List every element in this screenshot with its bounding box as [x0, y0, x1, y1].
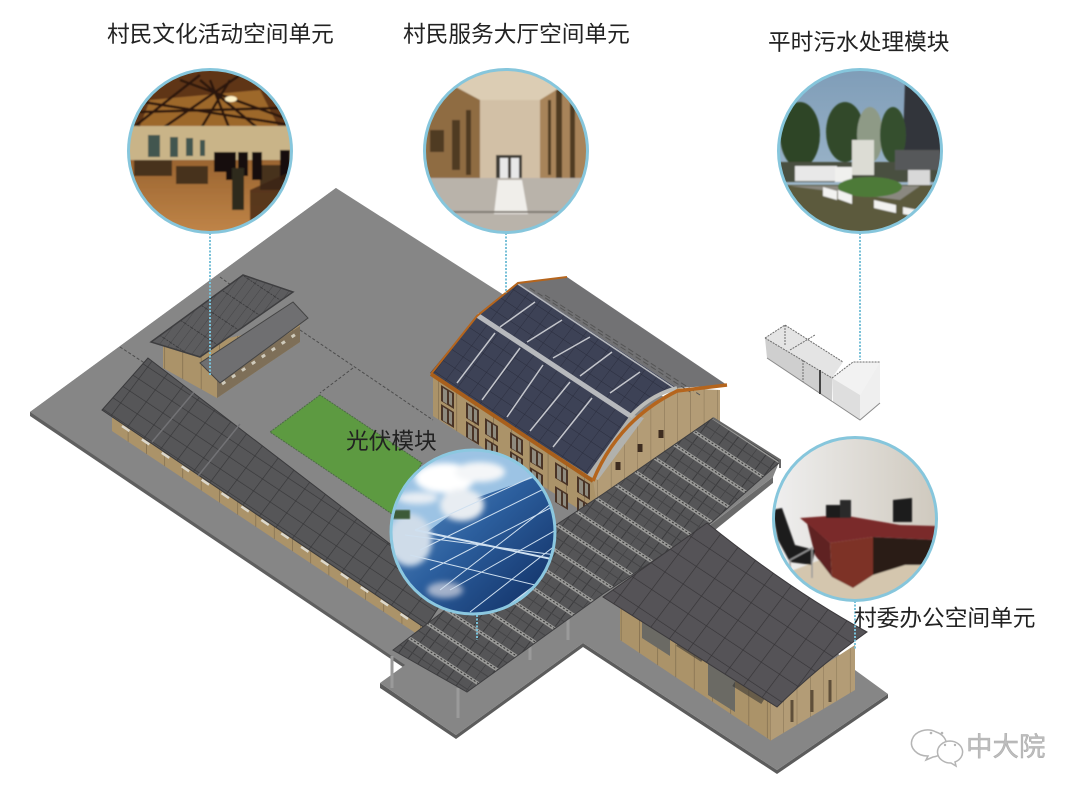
photo circle: village committee office space — [772, 437, 937, 601]
building: main hall walls — [433, 376, 720, 524]
photo circle: village cultural activity space — [128, 70, 292, 234]
lawn courtyard — [270, 395, 422, 514]
leader lines — [210, 233, 860, 650]
heading: village cultural activity space unit: 村民文化活动空间单元 — [107, 21, 334, 47]
heading: village service hall space unit: 村民服务大厅空间单元 — [403, 21, 630, 47]
watermark: WeChat icon and account name — [911, 730, 1046, 766]
main hall roof with solar panels — [430, 277, 727, 481]
labels — [107, 21, 1036, 631]
solar canopy structure — [392, 418, 780, 718]
photo circle: photovoltaic module — [388, 449, 556, 615]
building: village office — [603, 523, 867, 741]
building: long west range — [102, 358, 450, 636]
watermark: WeChat icon and account name: 中大院 — [966, 732, 1046, 762]
module: sewage tanks — [765, 325, 880, 420]
building: small north hall — [151, 275, 308, 398]
heading: village committee office space unit: 村委办公空间单元 — [854, 605, 1036, 631]
heading: photovoltaic module: 光伏模块 — [346, 428, 437, 454]
ground slab: walkway and office wing — [380, 418, 888, 774]
ground slab: main courtyard — [30, 188, 700, 682]
photo circle: village service hall space — [424, 70, 588, 234]
heading: everyday sewage treatment module: 平时污水处理模块 — [768, 29, 950, 55]
photo circle: everyday sewage treatment module — [778, 70, 945, 234]
